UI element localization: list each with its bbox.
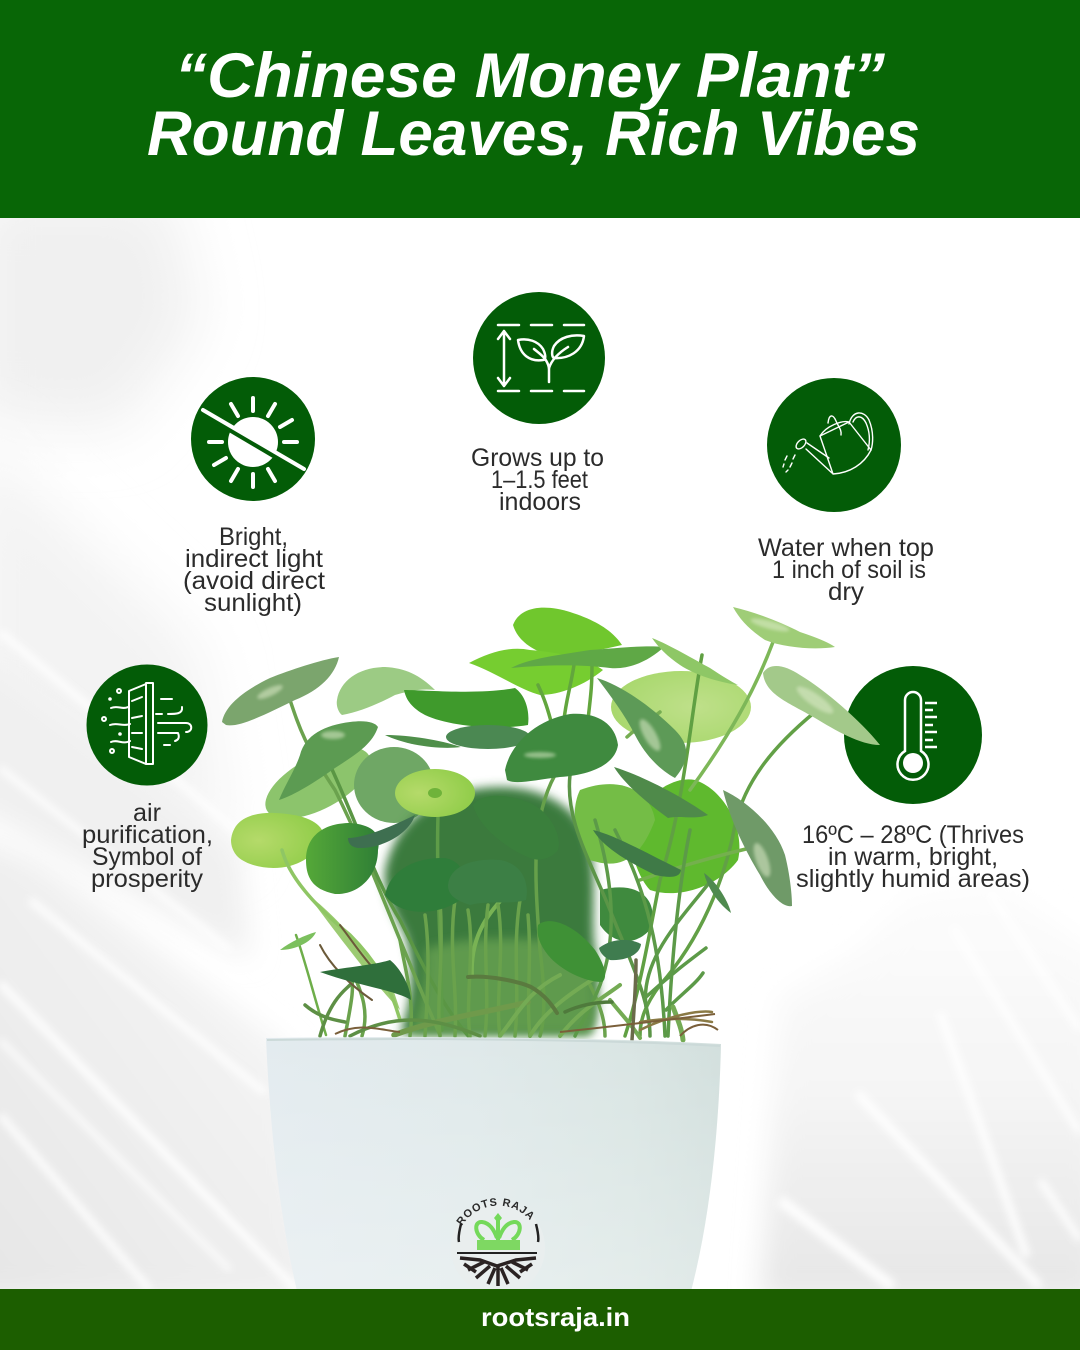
label: height: 1–1.5 feet (491, 466, 588, 494)
label: air: prosperity (91, 865, 204, 893)
pot sticker logo: ROOTS RAJA (456, 1198, 534, 1226)
label: light: Bright, (219, 523, 288, 551)
label: light: (avoid direct (183, 567, 325, 595)
title: “Chinese Money Plant” (175, 41, 885, 111)
plant photo illustration (222, 607, 880, 1040)
label: water: dry (828, 578, 865, 606)
footer website text: rootsraja.in (481, 1302, 630, 1332)
label: height: Grows up to (471, 444, 604, 472)
dark foliage mass behind stems (308, 784, 655, 1034)
icon: watering can (767, 378, 901, 512)
label: light: sunlight) (204, 589, 302, 617)
label: air: Symbol of (92, 843, 202, 871)
icon: no direct sun (191, 377, 315, 501)
icon: air purification (86, 664, 208, 786)
label: air: purification, (82, 821, 213, 849)
label: light: indirect light (185, 545, 323, 573)
label: temperature (796, 821, 1030, 893)
label: temperature: 16ºC – 28ºC (Thrives (802, 821, 1024, 849)
label: light (183, 523, 325, 617)
label: temperature: in warm, bright, (828, 843, 998, 871)
label: water: Water when top (758, 534, 934, 562)
label: air (82, 799, 213, 893)
title (147, 41, 920, 169)
white pot (266, 1037, 721, 1295)
back leaves (231, 608, 751, 893)
label: air: air (133, 799, 161, 827)
pot sticker logo (456, 1198, 540, 1286)
icon: thermometer (844, 666, 982, 804)
label: temperature: slightly humid areas) (796, 865, 1030, 893)
stems (282, 642, 815, 1040)
roots and soil (335, 1014, 718, 1036)
front leaves (222, 607, 880, 1000)
icon: plant height (473, 292, 605, 424)
label: water: 1 inch of soil is (772, 556, 926, 584)
label: height (471, 444, 604, 516)
header band (0, 0, 1080, 218)
footer band (0, 1289, 1080, 1350)
label: water (758, 534, 934, 606)
title: Round Leaves, Rich Vibes (147, 99, 920, 169)
label: height: indoors (499, 488, 581, 516)
